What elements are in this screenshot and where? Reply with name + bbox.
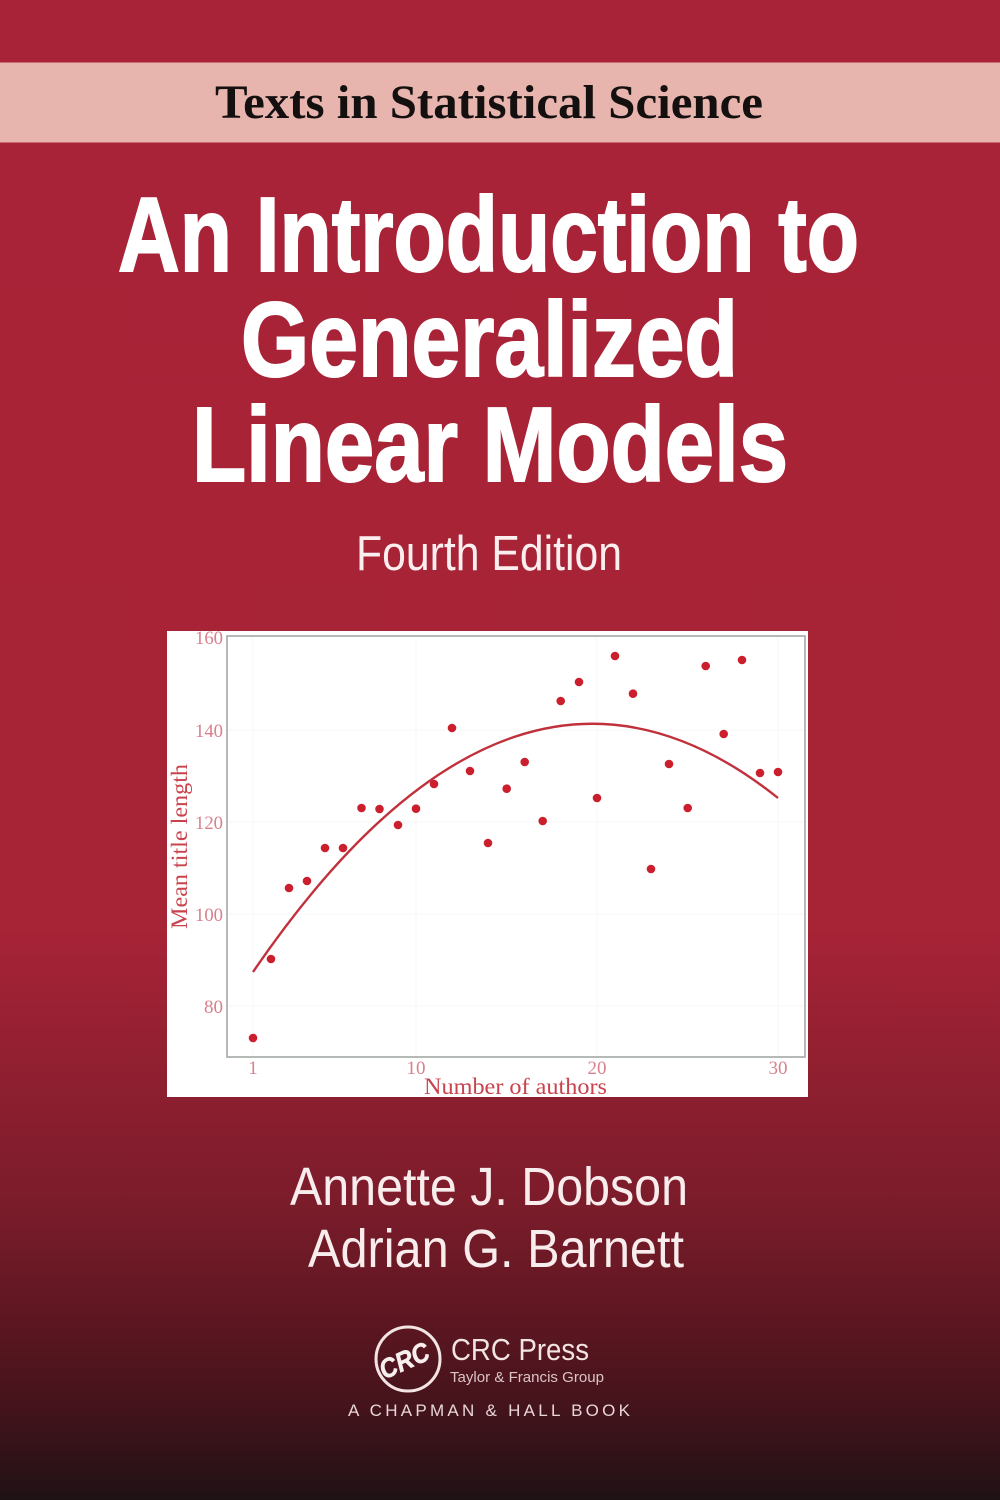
scatter plot panel [167, 628, 808, 1099]
publisher group: Taylor & Francis Group [450, 1369, 604, 1386]
fitted curve [253, 724, 778, 972]
series band [0, 62, 1000, 143]
main title: Generalized [241, 281, 738, 399]
imprint: A CHAPMAN & HALL BOOK [348, 1401, 631, 1420]
y axis labels: 120 [195, 813, 223, 834]
publisher logo [348, 1327, 631, 1420]
series title: Texts in Statistical Science [215, 76, 763, 129]
x axis labels: 1 [248, 1058, 258, 1079]
authors: Annette J. Dobson [290, 1157, 688, 1217]
edition: Fourth Edition [356, 527, 622, 581]
y axis title: Mean title length [167, 763, 192, 929]
y axis labels: 160 [195, 628, 223, 649]
y axis labels: 140 [195, 721, 223, 742]
publisher name: CRC Press [451, 1332, 589, 1367]
y axis labels: 80 [204, 997, 223, 1018]
x axis title: Number of authors [424, 1074, 607, 1099]
plot frame [227, 636, 805, 1057]
x axis labels [248, 1058, 788, 1079]
x axis labels: 10 [406, 1058, 426, 1079]
icon: CRC circle: CRC [374, 1336, 435, 1385]
grid lines [228, 637, 804, 1056]
authors: Adrian G. Barnett [308, 1219, 684, 1279]
y axis labels [195, 628, 223, 1018]
main title [118, 176, 859, 504]
y axis labels: 100 [195, 905, 223, 926]
data points [249, 652, 782, 1042]
main title: Linear Models [192, 386, 788, 504]
x axis labels: 20 [588, 1058, 606, 1079]
authors [290, 1157, 688, 1279]
x axis labels: 30 [768, 1058, 788, 1079]
